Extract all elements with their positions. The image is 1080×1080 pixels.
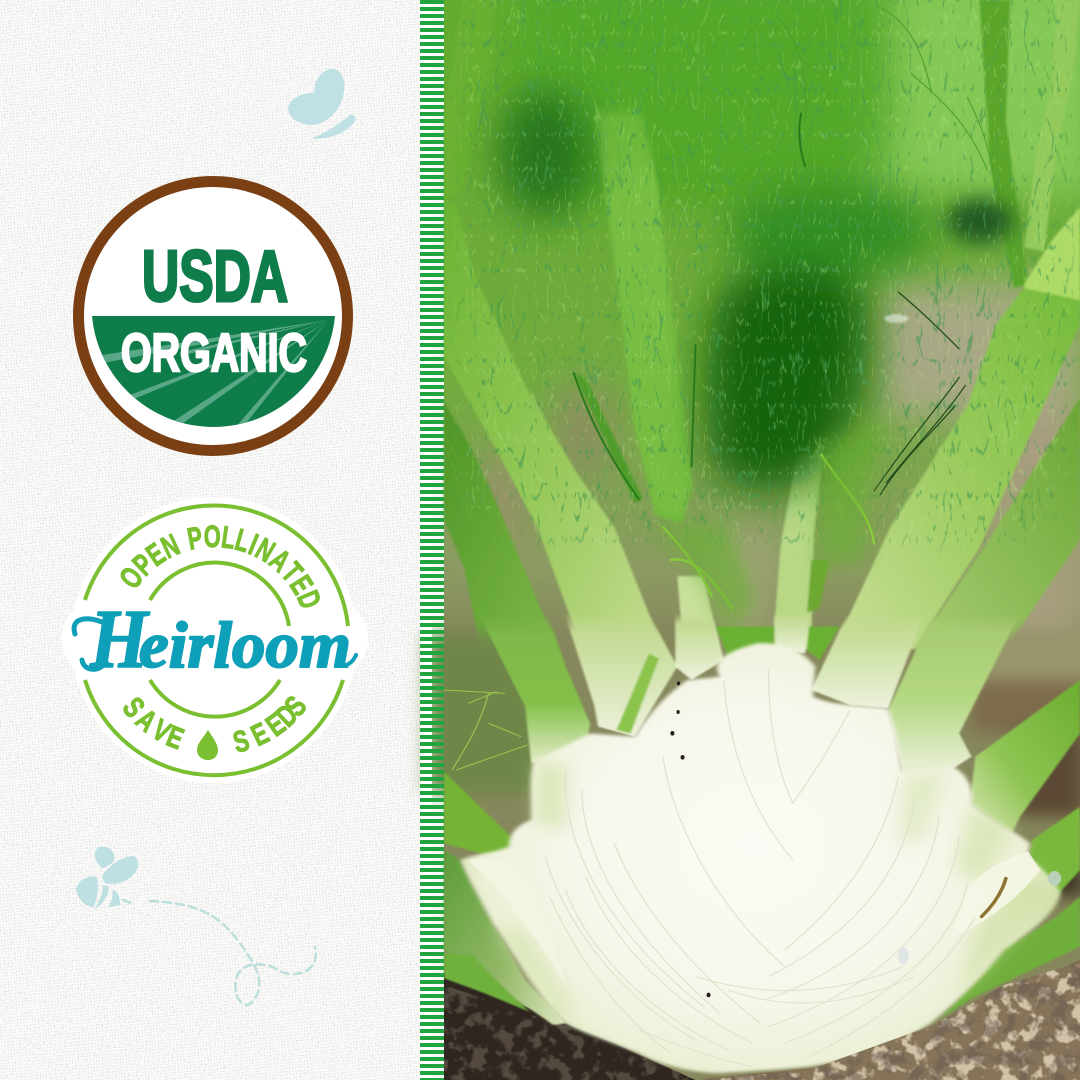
photo base bbox=[444, 580, 1080, 1080]
stalk: centre-left bbox=[594, 105, 692, 523]
base: right three bbox=[969, 680, 1080, 833]
green field bbox=[92, 316, 335, 427]
dark gaps behind fronds bbox=[499, 89, 592, 219]
text: Heirloom script: H bbox=[89, 593, 150, 686]
stalk: right main bbox=[833, 288, 1080, 649]
text: OPEN POLLINATED: O bbox=[112, 561, 150, 595]
bulb body bbox=[460, 643, 1061, 1073]
twig bbox=[982, 878, 1006, 917]
water drop right bbox=[1048, 871, 1061, 886]
text: Heirloom script bbox=[74, 593, 356, 686]
centre-left stalk seen through fronds bbox=[596, 114, 691, 519]
text: SAVE: V bbox=[147, 712, 177, 749]
base: left lower bbox=[444, 772, 515, 863]
stalk: centre-left lower bbox=[677, 576, 720, 649]
text: OPEN POLLINATED: D bbox=[290, 586, 328, 614]
text: OPEN POLLINATED bbox=[112, 519, 328, 614]
photo background bokeh bbox=[481, 0, 1080, 649]
text: SAVE bbox=[116, 691, 188, 756]
base: centre stub bbox=[675, 613, 724, 680]
text: OPEN POLLINATED: A bbox=[263, 542, 297, 579]
bulb fibre lines bbox=[545, 670, 975, 1067]
base: far left bbox=[444, 953, 529, 1012]
soil bbox=[444, 973, 696, 1080]
dark gap right bbox=[945, 199, 1014, 243]
stalk: left main bbox=[444, 199, 663, 649]
stalk: centre bottom thin bbox=[807, 560, 829, 613]
text: SAVE: E bbox=[162, 719, 188, 756]
upper photo: foliage and stalks bbox=[444, 0, 1080, 649]
haze of feathery foliage bbox=[509, 0, 890, 162]
bulb edge tints bbox=[493, 763, 1053, 1020]
text: ORGANIC: ORGANIC bbox=[121, 323, 307, 383]
water drop bbox=[898, 947, 909, 965]
text: SEEDS: S bbox=[229, 723, 253, 760]
badge: Heirloom open pollinated bbox=[62, 497, 368, 783]
bulb right flap bbox=[947, 852, 1040, 940]
text: SEEDS: E bbox=[260, 707, 292, 743]
fibres: dark filaments bbox=[444, 0, 1080, 568]
stalk: top-right pale bbox=[1024, 0, 1080, 252]
stalk: top-right thin bbox=[980, 0, 1028, 288]
grass blades bbox=[444, 690, 527, 770]
text: SAVE: A bbox=[129, 702, 164, 739]
text: OPEN POLLINATED: N bbox=[250, 531, 281, 569]
text: OPEN POLLINATED: P bbox=[185, 520, 205, 557]
text: SEEDS: S bbox=[278, 689, 313, 722]
brown ring bbox=[78, 182, 348, 450]
text: SEEDS: E bbox=[246, 716, 274, 753]
base: frond cluster bbox=[716, 627, 840, 660]
panel: fennel photograph bbox=[428, 0, 1080, 1080]
stems and fine fronds bbox=[574, 8, 996, 609]
icon: butterfly bbox=[288, 69, 356, 139]
stalk: inner thin bbox=[574, 373, 643, 503]
text: OPEN POLLINATED: T bbox=[275, 556, 310, 589]
bee flight path bbox=[123, 900, 316, 1005]
base: right one bbox=[811, 613, 925, 708]
sticker backing bbox=[62, 497, 368, 783]
stalk: right second bbox=[915, 398, 1080, 649]
text: SEEDS bbox=[229, 689, 313, 760]
icon: seed drop bbox=[197, 730, 218, 760]
text: USDA: USDA bbox=[142, 237, 288, 317]
stalk: centre bottom bbox=[773, 454, 823, 649]
text: OPEN POLLINATED: P bbox=[126, 547, 160, 582]
text: SEEDS: D bbox=[269, 698, 304, 733]
base: right two bbox=[888, 613, 1020, 773]
stalk bases bbox=[444, 613, 1080, 1025]
ground behind bulb bbox=[428, 633, 1080, 897]
field rays bbox=[102, 320, 328, 424]
dark frond mass bbox=[705, 187, 935, 490]
base: left stalk bbox=[478, 613, 590, 763]
stalks bbox=[444, 0, 1080, 649]
lower photo: fennel bulb on soil bbox=[428, 613, 1080, 1080]
base: left outer bbox=[444, 850, 566, 1025]
rings bbox=[85, 506, 348, 775]
soil grain right bbox=[700, 962, 1080, 1080]
base: second left bbox=[564, 613, 677, 737]
base: right five bbox=[939, 897, 1080, 1020]
bulb left flap outline bbox=[468, 859, 566, 987]
text: OPEN POLLINATED: I bbox=[244, 527, 263, 562]
text: OPEN POLLINATED: E bbox=[140, 536, 171, 573]
base: centre stalk bbox=[773, 613, 810, 653]
text: Heirloom script: eirloom bbox=[139, 609, 351, 682]
green stripes bbox=[420, 0, 444, 1080]
base: green rib bbox=[616, 653, 659, 733]
soil grain left bbox=[444, 987, 700, 1080]
frond tips: bright clusters bbox=[655, 418, 886, 636]
icon: bee bbox=[76, 846, 138, 908]
text: OPEN POLLINATED: L bbox=[231, 522, 254, 559]
text: OPEN POLLINATED: N bbox=[156, 527, 185, 565]
decorative striped border bbox=[420, 0, 444, 1080]
fibres: light filaments bbox=[444, 0, 1080, 568]
text: SAVE: S bbox=[116, 691, 152, 724]
stalk: far-left top bbox=[444, 0, 497, 199]
text: OPEN POLLINATED: E bbox=[283, 569, 320, 600]
badge: USDA Organic bbox=[78, 182, 348, 450]
text: OPEN POLLINATED: O bbox=[203, 519, 221, 554]
panel: fabric background bbox=[0, 0, 420, 1080]
text: OPEN POLLINATED: L bbox=[219, 519, 237, 556]
soil right bbox=[696, 960, 1080, 1080]
seed specks bbox=[670, 681, 711, 997]
base: right four bbox=[1002, 807, 1080, 952]
white glint through fronds bbox=[884, 314, 909, 323]
stalk: left lower bbox=[444, 402, 558, 649]
stalk: right band bbox=[1024, 207, 1080, 308]
